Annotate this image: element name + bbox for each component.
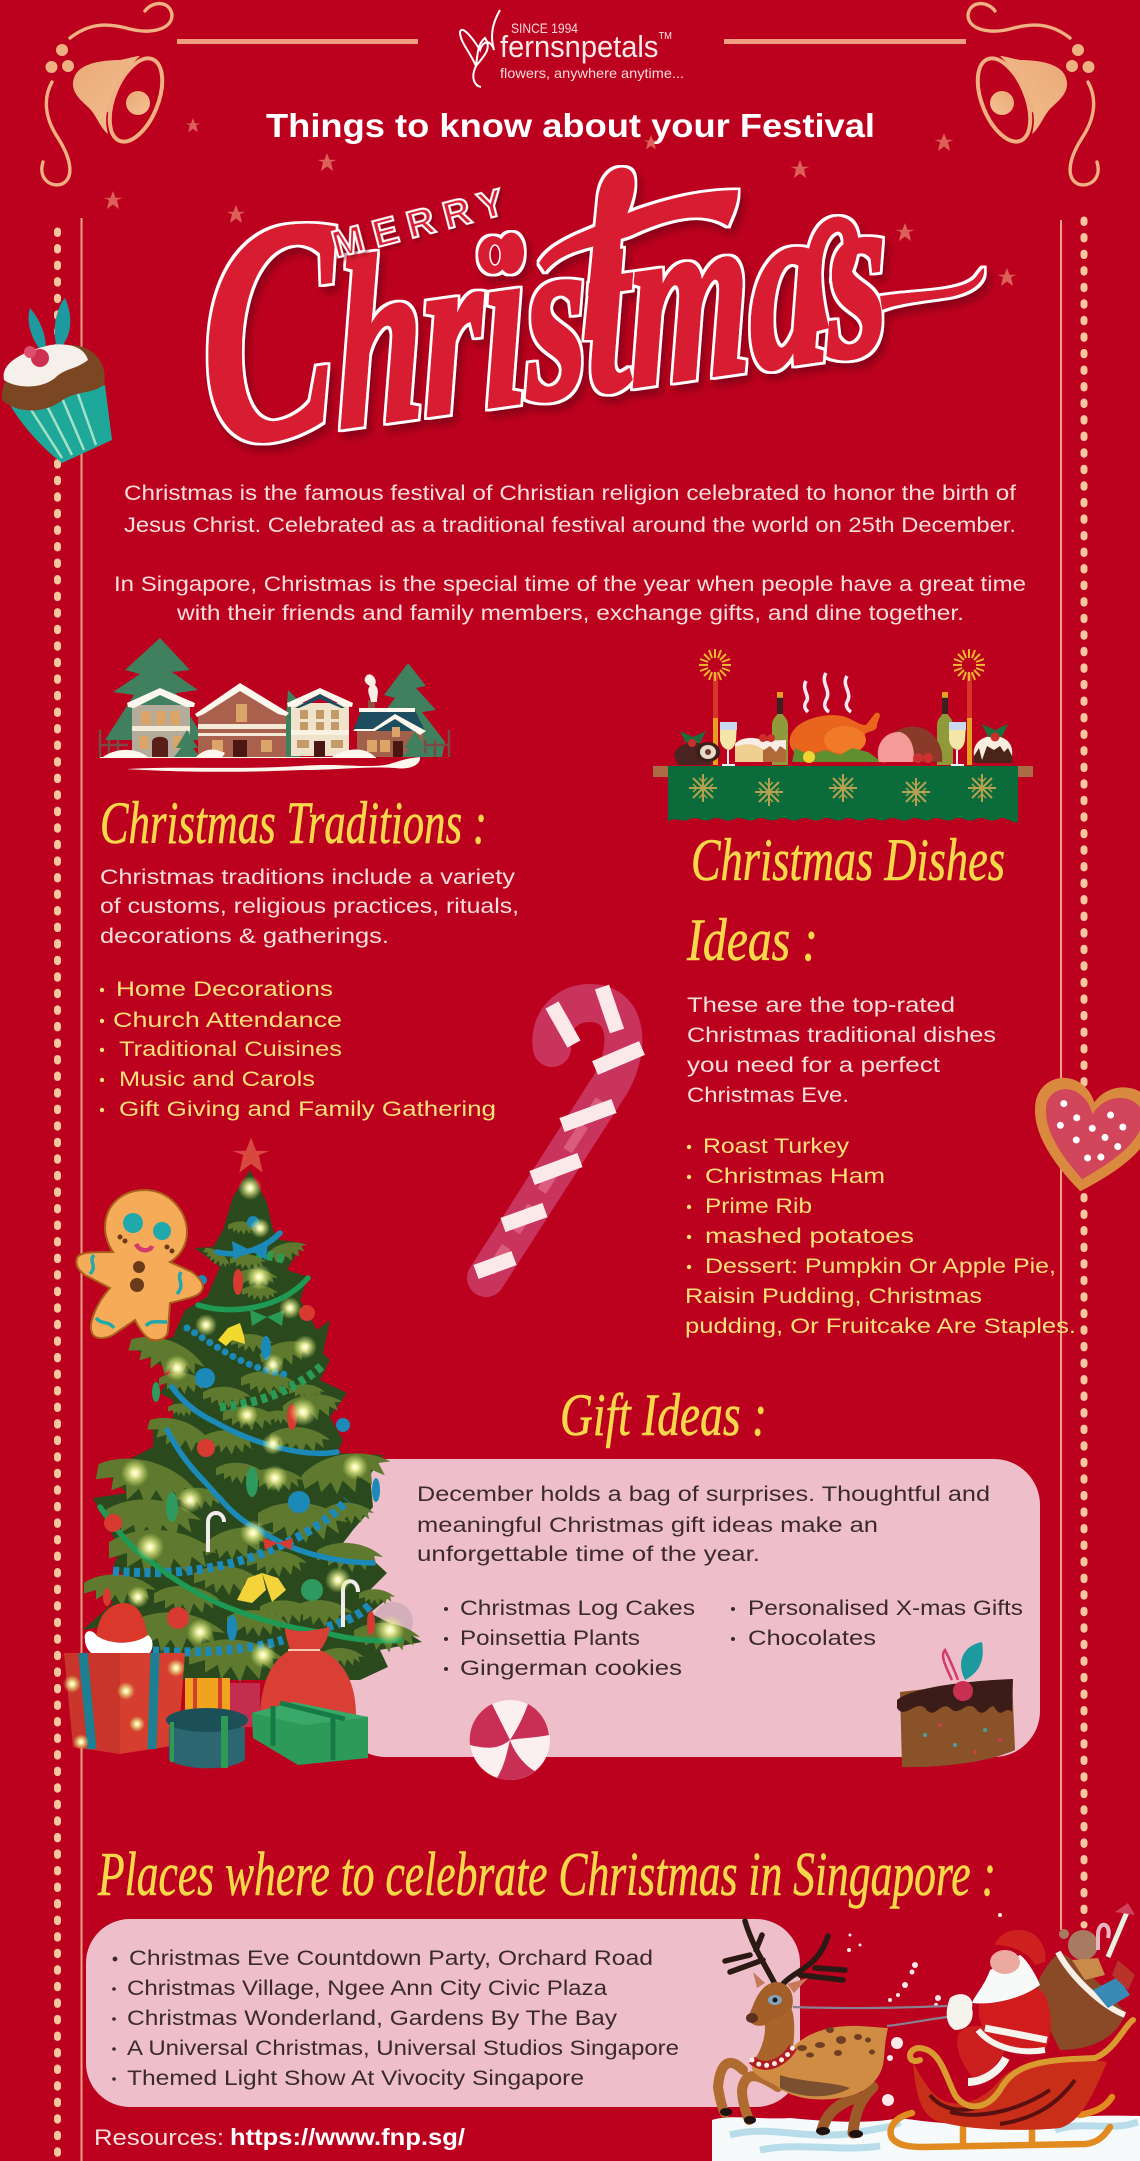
pudding	[974, 737, 1012, 763]
tree silhouette	[83, 1170, 422, 1680]
gift list column 1	[444, 1607, 448, 1611]
pink gift	[230, 1683, 260, 1727]
reindeer neck	[752, 2005, 794, 2065]
crossbar of the t	[539, 190, 738, 272]
bottles	[772, 692, 788, 765]
icon: fruit cake	[897, 1642, 1015, 1767]
blue bunting	[113, 1500, 370, 1652]
cupcake frosting	[4, 344, 88, 386]
panel: gift ideas: Gingerman cookies	[460, 1657, 682, 1680]
paragraph: Christmas traditions include a variety	[100, 866, 516, 889]
panel: places	[86, 1919, 800, 2107]
sleigh runners	[891, 2097, 1112, 2147]
logo	[460, 10, 684, 87]
section: Christmas traditions: Traditional Cuisines	[119, 1038, 342, 1061]
santa face	[990, 1950, 1020, 1974]
resources	[94, 2124, 466, 2150]
place 3	[112, 2017, 116, 2021]
candy canes on tree	[208, 1513, 224, 1552]
section: Christmas dishes: Dessert: Pumpkin Or Apple Pie,	[705, 1255, 1056, 1278]
section: Christmas dishes: pudding, Or Fruitcake Are Staples.	[685, 1315, 1076, 1338]
snowflakes on cloth	[689, 774, 996, 806]
sleigh body	[913, 2060, 1107, 2130]
snow	[100, 749, 376, 758]
wordmark: fernsnpetals	[500, 29, 669, 64]
house 4	[357, 730, 423, 757]
reindeer front legs	[718, 2063, 778, 2120]
bullet list	[100, 988, 104, 992]
panel: gift ideas: Personalised X-mas Gifts	[748, 1597, 1023, 1620]
small trees	[174, 730, 200, 757]
fence	[100, 730, 450, 757]
intro line 1: Christmas is the famous festival of Christian religion celebrated to honor the birth of	[124, 482, 1016, 505]
log cake	[674, 743, 712, 765]
top divider left	[177, 39, 418, 44]
santa legs	[957, 2026, 1010, 2080]
candles	[713, 673, 718, 719]
place 4	[112, 2047, 116, 2051]
panel: gift ideas: Chocolates	[748, 1627, 876, 1650]
santa beard	[972, 1955, 1040, 2003]
left dotted border	[54, 231, 61, 2161]
green scalloped garlands	[100, 1278, 400, 1641]
intro text	[114, 482, 1026, 625]
panel: gift ideas: unforgettable time of the year.	[417, 1543, 760, 1566]
section: Christmas dishes: Christmas traditional dishes	[687, 1024, 996, 1047]
bullet list	[687, 1145, 691, 1149]
section: Christmas traditions: of customs, religious practices, rituals,	[100, 895, 519, 918]
section: Christmas traditions: decorations & gatherings.	[100, 925, 389, 948]
reindeer body	[752, 2026, 888, 2099]
illustration: Christmas dinner table	[653, 649, 1033, 822]
blue bead garland	[187, 1328, 290, 1375]
icon: peppermint candy	[470, 1700, 550, 1780]
panel: places: Christmas Wonderland, Gardens By The Bay	[127, 2007, 618, 2030]
section: Christmas dishes: you need for a perfect	[687, 1054, 940, 1077]
panel: places: A Universal Christmas, Universal Studios Singapore	[127, 2037, 679, 2060]
right border line	[1060, 220, 1062, 1930]
icon: heart cookie	[1023, 1074, 1140, 1201]
icon: gingerbread man	[76, 1190, 203, 1340]
place 2	[112, 1987, 116, 1991]
flourish of the final s	[880, 268, 984, 310]
heading line 2: Ideas :	[686, 907, 818, 973]
wordmark: TM	[658, 31, 672, 42]
yellow bells	[218, 1323, 245, 1346]
illustration: Santa, sleigh and reindeer	[712, 1903, 1140, 2161]
top divider right	[724, 39, 966, 44]
icon: candy cane	[476, 987, 642, 1278]
tree lights	[121, 1176, 405, 1668]
section: Christmas dishes: Roast Turkey	[703, 1135, 850, 1158]
reins	[793, 2006, 947, 2026]
resources: Resources:	[94, 2125, 224, 2150]
reindeer hooves	[720, 2108, 863, 2138]
steam	[805, 673, 851, 712]
candle sparks	[699, 649, 731, 681]
logo mark	[460, 10, 500, 87]
section: Christmas dishes: Raisin Pudding, Christmas	[685, 1285, 982, 1308]
title: Things to know about your Festival	[266, 107, 875, 144]
ornaments	[103, 1216, 380, 1641]
icon: cupcake	[2, 298, 112, 463]
section: Christmas traditions: Church Attendance	[113, 1009, 342, 1032]
trees	[105, 638, 205, 740]
santa hat	[96, 1603, 148, 1642]
section: Christmas traditions: Home Decorations	[116, 978, 333, 1001]
toy cane and arrow	[1108, 1912, 1127, 1957]
cupcake wrapper	[10, 385, 112, 463]
snow ground	[712, 2116, 1140, 2161]
panel: places: Christmas Village, Ngee Ann City Civic Plaza	[127, 1977, 607, 2000]
ham	[880, 727, 942, 762]
section: Christmas dishes: mashed potatoes	[705, 1225, 914, 1248]
reindeer antlers	[725, 1921, 845, 1984]
paragraph: December holds a bag of surprises. Thoughtful and	[417, 1483, 990, 1506]
foliage tufts	[84, 1222, 420, 1682]
main heading: Christmas	[196, 73, 984, 514]
icon: left bell	[42, 4, 173, 185]
place 5	[112, 2077, 116, 2081]
Merry: MERRY	[328, 182, 509, 267]
since: SINCE 1994	[511, 20, 578, 36]
section: Christmas dishes	[685, 827, 1076, 1338]
icon: right bell	[967, 4, 1098, 185]
section: Gift ideas heading: Gift Ideas :	[560, 1382, 767, 1448]
yellow gift	[185, 1678, 230, 1716]
loop of the final s	[814, 224, 851, 330]
house 1	[132, 705, 190, 757]
panel: gift ideas	[340, 1459, 1040, 1757]
gift list column 2	[731, 1607, 735, 1611]
tablecloth	[668, 766, 1018, 822]
section: Christmas dishes: Christmas Ham	[705, 1165, 885, 1188]
section: Christmas traditions: Gift Giving and Family Gathering	[119, 1098, 496, 1121]
gift in sack	[1093, 1977, 1130, 2008]
right dotted border	[1080, 220, 1088, 1925]
santa gloves	[947, 1994, 973, 2030]
illustration: Christmas tree	[83, 1138, 422, 1682]
tagline: flowers, anywhere anytime...	[500, 65, 684, 81]
left border line	[80, 218, 82, 2161]
snow specks	[847, 1913, 1002, 2106]
stem of the t	[584, 167, 635, 340]
reindeer back legs	[822, 2087, 873, 2133]
heading: Christmas Traditions :	[100, 790, 487, 856]
santa coat	[979, 1986, 1051, 2050]
teal gift	[169, 1727, 245, 1768]
collar	[752, 2047, 793, 2065]
panel background	[340, 1459, 1040, 1757]
panel background	[86, 1919, 800, 2107]
sack	[260, 1627, 356, 1715]
tree star	[232, 1138, 270, 1173]
wooden table ends	[653, 766, 1033, 777]
heading line 1: Christmas Dishes	[691, 827, 1005, 893]
cupcake sponge	[2, 345, 105, 410]
sack	[1037, 1952, 1125, 2050]
intro line 3: In Singapore, Christmas is the special time of the year when people have a great time	[114, 573, 1026, 596]
turkey	[790, 713, 880, 760]
cake slice	[735, 739, 786, 762]
santa hat on head	[995, 1930, 1046, 1965]
house 2	[198, 688, 286, 757]
green gift	[252, 1702, 368, 1765]
blue and green bows	[232, 1241, 268, 1260]
panel: gift ideas: meaningful Christmas gift ideas make an	[417, 1514, 878, 1537]
gifts	[63, 1603, 368, 1768]
champagne glasses	[720, 722, 737, 750]
intro line 4: with their friends and family members, exchange gifts, and dine together.	[176, 602, 964, 625]
resources: https://www.fnp.sg/	[230, 2124, 466, 2150]
panel: gift ideas: Poinsettia Plants	[460, 1627, 640, 1650]
paragraph: These are the top-rated	[687, 994, 955, 1017]
section: Christmas traditions: Music and Carols	[119, 1068, 315, 1091]
cupcake leaves	[29, 298, 70, 355]
panel: gift ideas: Christmas Log Cakes	[460, 1597, 695, 1620]
teddy	[1068, 1930, 1098, 1960]
chimney smoke	[365, 674, 378, 702]
panel: places: Themed Light Show At Vivocity Singapore	[127, 2067, 584, 2090]
section: Christmas dishes: Christmas Eve.	[687, 1084, 849, 1107]
large red gift	[64, 1653, 120, 1754]
panel: places: Christmas Eve Countdown Party, Orchard Road	[129, 1947, 653, 1970]
decorative stars	[104, 118, 1016, 286]
blue scalloped garlands	[167, 1233, 373, 1563]
place 1	[113, 1957, 117, 1961]
dot of the i	[478, 236, 508, 274]
section: Christmas traditions	[100, 790, 519, 1121]
illustration: snowy village	[100, 638, 450, 772]
grey bauble behind tree	[373, 1602, 413, 1642]
reindeer head	[749, 1982, 793, 2026]
green bunting	[220, 1253, 323, 1407]
intro line 2: Jesus Christ. Celebrated as a traditional festival around the world on 25th December.	[124, 514, 1016, 537]
house 3	[291, 703, 349, 756]
i dot counter	[490, 245, 500, 265]
section: Christmas dishes: Prime Rib	[705, 1195, 812, 1218]
sleigh rim	[910, 2020, 1133, 2106]
